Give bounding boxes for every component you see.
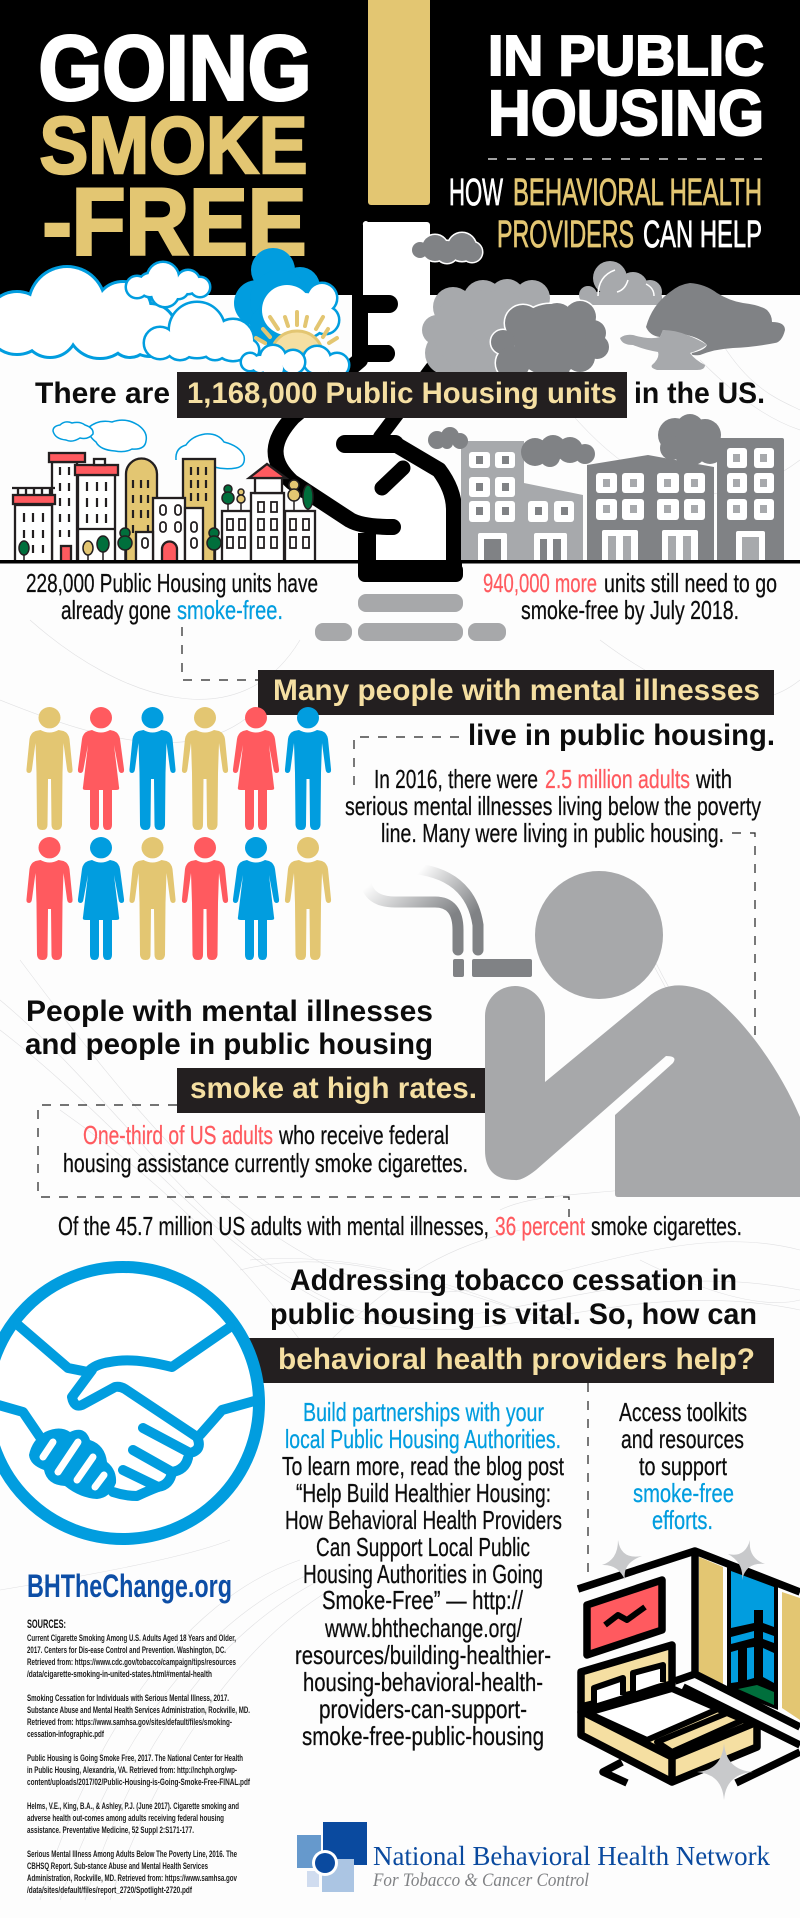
text: build partnerships: housing-behavioral-health-	[303, 1667, 543, 1697]
sources list: assistance. Preventative Medicine, 52 Suppl 2:S171-177.	[27, 1825, 194, 1835]
sources list: Helms, V.E., King, B.A., & Ashley, P.J. (June 2017). Cigarette smoking and	[27, 1801, 239, 1811]
logo: National Behavioral Health Network: National Behavioral Health Network	[373, 1841, 770, 1871]
text: build partnerships: Can Support Local Public	[316, 1532, 530, 1562]
text: one-third of adults: who receive federal	[278, 1120, 449, 1150]
text: access toolkits: Access toolkits	[619, 1397, 747, 1427]
icon: bent cigarette	[276, 221, 506, 641]
text: units still to go	[483, 568, 777, 625]
sources list: Serious Mental Illness Among Adults Below The Poverty Line, 2016. The	[27, 1849, 237, 1859]
text: one-third of adults	[63, 1120, 468, 1178]
heading: smoke at high rates	[25, 995, 485, 1113]
text: build partnerships: “Help Build Healthier Housing:	[296, 1478, 551, 1508]
brand link: BHTheChange.org	[27, 1568, 232, 1604]
header black background	[0, 0, 800, 295]
text: 36 percent: smoke cigarettes.	[591, 1211, 742, 1241]
heading: many people with mental illnesses	[258, 670, 775, 752]
text: build partnerships: resources/building-healthier-	[295, 1640, 551, 1670]
text: build partnerships: Build partnerships with your	[303, 1397, 544, 1427]
highlight band	[177, 372, 627, 418]
text: 36 percent: Of the 45.7 million US adults with mental illnesses,	[58, 1211, 489, 1241]
text: build partnerships: providers-can-support-	[319, 1694, 527, 1724]
text: build partnerships: How Behavioral Health Providers	[285, 1505, 562, 1535]
heading: public housing units: 1,168,000 Public Housing units	[187, 377, 617, 410]
icon: sparkles	[602, 1540, 765, 1800]
text: already smoke-free: smoke-free.	[177, 595, 283, 625]
heading: addressing tobacco cessation: Addressing tobacco cessation in	[290, 1264, 737, 1297]
heading: addressing tobacco cessation: public housing is vital. So, how can	[270, 1298, 757, 1331]
text: already smoke-free	[26, 568, 318, 625]
text: 2.5 million adults: 2.5 million adults	[545, 764, 690, 794]
title: going smoke-free: SMOKE	[40, 101, 308, 191]
title: in public housing: IN PUBLIC	[488, 24, 764, 88]
sources list: CBHSQ Report. Sub-stance Abuse and Mental Health Services	[27, 1861, 208, 1871]
illustration: white clouds and sun	[0, 248, 348, 378]
sources list: Administration, Rockville, MD. Retrieved from: https://www.samhsa.gov	[27, 1873, 237, 1883]
heading: many people with mental illnesses: Many people with mental illnesses	[273, 674, 760, 707]
text: 2.5 million adults: with	[695, 764, 732, 794]
text: access toolkits	[619, 1397, 747, 1535]
text: build partnerships: www.bhthechange.org/	[324, 1613, 523, 1643]
illustration: clean bedroom	[578, 1540, 800, 1800]
text: build partnerships: Smoke-Free” — http://	[322, 1585, 524, 1615]
sources list: adverse health out-comes among adults receiving federal housing	[27, 1813, 224, 1823]
icon: gold cigarette filter	[368, 0, 430, 205]
title: in public housing	[488, 24, 764, 149]
text: already smoke-free: 228,000 Public Housing units have	[26, 568, 318, 598]
sources list: 2017. Centers for Dis-ease Control and Prevention. Washington, DC.	[27, 1645, 226, 1655]
subtitle: HOW	[449, 172, 503, 214]
title: going smoke-free: -FREE	[42, 170, 306, 276]
heading: smoke at high rates: People with mental illnesses	[26, 995, 433, 1028]
text: already smoke-free: already gone	[61, 595, 171, 625]
sources list: cessation-infographic.pdf	[27, 1729, 105, 1739]
heading: public housing units: There are	[35, 377, 170, 410]
heading: addressing tobacco cessation	[240, 1264, 774, 1383]
heading: public housing units	[35, 372, 765, 418]
text: build partnerships: local Public Housing Authorities.	[285, 1424, 561, 1454]
illustration: smoke-free city	[12, 420, 315, 562]
logo: National Behavioral Health Network: For Tobacco & Cancer Control	[372, 1870, 589, 1891]
sources list: Current Cigarette Smoking Among U.S. Adults Aged 18 Years and Older,	[27, 1633, 236, 1643]
icon row: people	[26, 707, 331, 960]
text: build partnerships: To learn more, read the blog post	[282, 1451, 565, 1481]
logo: National Behavioral Health Network	[297, 1822, 770, 1892]
subtitle	[449, 172, 762, 256]
sources list: SOURCES:	[27, 1617, 66, 1631]
sources list: content/uploads/2017/02/Public-Housing-is-Going-Smoke-Free-FINAL.pdf	[27, 1777, 251, 1787]
illustration: smoky city	[428, 414, 784, 562]
text: one-third of adults: One-third of US adults	[83, 1120, 273, 1150]
text: access toolkits: to support	[639, 1451, 728, 1481]
icon: handshake	[0, 1267, 259, 1539]
text: 2.5 million adults: In 2016, there were	[374, 764, 538, 794]
ground line	[0, 560, 800, 564]
heading: many people with mental illnesses: live in public housing.	[468, 719, 775, 752]
text: access toolkits: and resources	[621, 1424, 744, 1454]
sources list: Substance Abuse and Mental Health Services Administration, Rockville, MD.	[27, 1705, 250, 1715]
illustration: gray smoke clouds	[412, 233, 785, 384]
icon: smoker with cigarette	[365, 868, 800, 1197]
text: one-third of adults: housing assistance currently smoke cigarettes.	[63, 1148, 468, 1178]
sources list: Smoking Cessation for Individuals with Serious Mental Illness, 2017.	[27, 1693, 229, 1703]
text: build partnerships: Housing Authorities in Going	[303, 1559, 543, 1589]
sources list: /data/cigarette-smoking-in-united-states.html#mental-health	[27, 1669, 212, 1679]
text: build partnerships: smoke-free-public-housing	[302, 1721, 544, 1751]
text: access toolkits: smoke-free	[633, 1478, 734, 1508]
subtitle: PROVIDERS	[497, 214, 634, 256]
sources list: Retrieved from: https://www.cdc.gov/tobacco/campaign/tips/resources	[27, 1657, 236, 1667]
heading: public housing units: in the US.	[634, 377, 765, 410]
sources list: /data/sites/default/files/report_2720/Spotlight-2720.pdf	[27, 1885, 193, 1895]
text: build partnerships	[282, 1397, 565, 1751]
heading: smoke at high rates: smoke at high rates.	[190, 1072, 477, 1105]
sources list: Retrieved from: https://www.samhsa.gov/sites/default/files/smoking-	[27, 1717, 232, 1727]
title: in public housing: HOUSING	[488, 77, 764, 149]
title: going smoke-free	[38, 18, 312, 276]
text: access toolkits: efforts.	[652, 1505, 713, 1535]
heading: addressing tobacco cessation: behavioral health providers help?	[278, 1343, 755, 1376]
title: going smoke-free: GOING	[38, 18, 312, 120]
sources list	[27, 1617, 251, 1895]
heading: smoke at high rates: and people in public housing	[25, 1028, 433, 1061]
text: 36 percent: 36 percent	[495, 1211, 586, 1241]
text: units still to go: 940,000 more	[483, 568, 597, 598]
text: 2.5 million adults	[345, 764, 761, 848]
icon: cigarette ash bars	[315, 594, 506, 641]
sources list: in Public Housing, Alexandria, VA. Retrieved from: http://nchph.org/wp-	[27, 1765, 237, 1775]
sources list: Public Housing is Going Smoke Free, 2017. The National Center for Health	[27, 1753, 243, 1763]
